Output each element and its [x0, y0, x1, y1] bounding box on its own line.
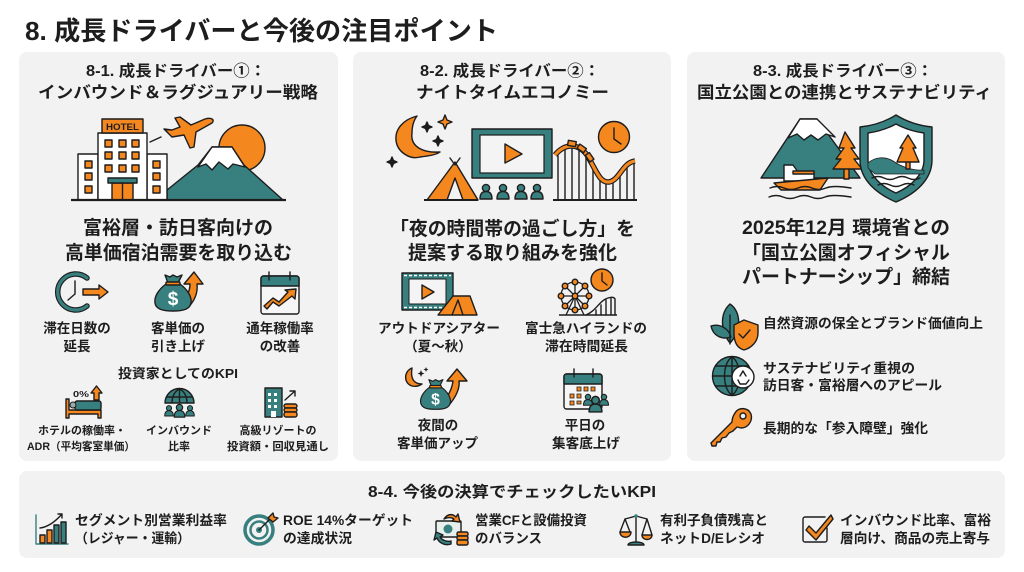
label: occupancy: の改善: [260, 338, 300, 354]
icon: boat: [774, 165, 828, 190]
subheading: 2025年12月 環境省との: [742, 216, 950, 239]
text: sustainability appeal: 訪日客・富裕層へのアピール: [763, 377, 943, 393]
icon: checkbox: [803, 515, 833, 542]
subheading: 「国立公園オフィシャル: [742, 242, 950, 264]
icon: bar chart: [36, 514, 68, 544]
label: night spending: 夜間の: [418, 417, 458, 433]
label: Fuji-Q stay: 滞在時間延長: [545, 338, 629, 354]
label: outdoor theater: [378, 321, 500, 354]
icon: mountain: [761, 119, 860, 178]
icon: Ferris wheel, clock and coaster: [558, 269, 617, 315]
subheading: [742, 216, 950, 288]
label: outdoor theater: アウトドアシアター: [378, 321, 500, 336]
icon: roller coaster: [555, 140, 635, 200]
label: resort investment: 投資額・回収見通し: [227, 439, 329, 453]
illustration: hotel, plane and Mt. Fuji: HOTEL: [106, 122, 139, 133]
label: night spending: [397, 417, 478, 451]
subheading: 高単価宿泊需要を取り込む: [65, 242, 292, 264]
heading: 8-3: 国立公園との連携とサステナビリティ: [697, 82, 992, 102]
icon: target with arrow: [245, 513, 278, 544]
label: night spending: 客単価アップ: [397, 435, 478, 451]
subheading: パートナーシップ」締結: [742, 266, 950, 288]
label: unit price: [151, 320, 205, 354]
heading: 8-2: ナイトタイムエコノミー: [416, 83, 609, 102]
text: ROE target: ROE 14%ターゲット: [283, 512, 413, 528]
text: sustainability appeal: サステナビリティ重視の: [763, 360, 915, 376]
label: inbound ratio: 比率: [168, 439, 190, 453]
label: inbound ratio: [146, 424, 212, 453]
label: weekday attendance: 集客底上げ: [552, 435, 621, 451]
label: occupancy and ADR: [27, 423, 135, 453]
icon: resort building with coins: [265, 388, 297, 417]
subheading: 「夜の時間帯の過ごし方」を: [390, 217, 635, 240]
icon: outdoor theater: [402, 273, 477, 315]
text: inbound and wealthy sales: 層向け、商品の売上寄与: [840, 530, 990, 546]
label: occupancy and ADR: ADR（平均客室単価）: [27, 439, 135, 453]
heading: 8-3: 8-3. 成長ドライバー③：: [753, 61, 933, 80]
subheading: 富裕層・訪日客向けの: [83, 217, 273, 239]
text: nature conservation: 自然資源の保全とブランド価値向上: [763, 315, 983, 331]
icon: pine tree: [833, 132, 862, 179]
heading: 8-3: [697, 61, 992, 102]
label: Fuji-Q stay: [525, 320, 647, 354]
subheading: investor KPI: 投資家としてのKPI: [118, 366, 238, 381]
icon: globe with people: [165, 388, 194, 417]
text: debt and D/E: ネットD/Eレシオ: [660, 531, 765, 546]
label: occupancy: 通年稼働率: [246, 320, 314, 336]
label: outdoor theater: （夏〜秋）: [404, 339, 472, 354]
heading: 8-1: [38, 61, 319, 102]
heading: 8-1: 8-1. 成長ドライバー①：: [86, 61, 266, 80]
text: inbound and wealthy sales: [840, 513, 992, 546]
icon: bed with occupancy arrow: [66, 386, 102, 418]
waves: [769, 186, 851, 198]
text: cash flow and capex: [475, 512, 587, 546]
icon: clock: [598, 122, 630, 152]
icon: shield: [860, 115, 932, 202]
label: stay length: 滞在日数の: [43, 320, 111, 336]
icon: night money bag: [406, 367, 467, 409]
icon: tent: [427, 158, 478, 200]
text: segment margin: セグメント別営業利益率: [75, 512, 227, 528]
subheading: [65, 217, 292, 264]
text: inbound and wealthy sales: インバウンド比率、富裕: [840, 513, 992, 528]
icon: audience: [480, 184, 543, 199]
icon: clock with arrow: [58, 274, 108, 310]
title: 8. 成長ドライバーと今後の注目ポイント: [25, 16, 498, 46]
text: segment margin: [75, 512, 227, 546]
text: cash flow and capex: のバランス: [475, 531, 542, 546]
text: entry barrier: 長期的な「参入障壁」強化: [763, 420, 929, 436]
text: debt and D/E: [660, 512, 768, 546]
text: ROE target: [283, 512, 413, 546]
icon: stars: [387, 115, 452, 167]
subheading: [390, 217, 635, 264]
label: stay length: [43, 320, 111, 354]
panel: growth driver 1: [19, 52, 338, 461]
label: unit price: 客単価の: [151, 320, 205, 336]
label: resort investment: 高級リゾートの: [240, 423, 316, 437]
label: occupancy and ADR: ホテルの稼働率・: [38, 423, 126, 437]
heading: 8-1: インバウンド＆ラグジュアリー戦略: [38, 82, 319, 102]
icon: bed with occupancy arrow: 0%: [73, 389, 90, 399]
heading: 8-2: 8-2. 成長ドライバー②：: [420, 61, 600, 80]
heading: 8-4: 8-4. 今後の決算でチェックしたいKPI: [368, 482, 656, 501]
label: weekday attendance: 平日の: [565, 418, 605, 433]
text: segment margin: （レジャー・運輸）: [75, 530, 190, 546]
text: cash flow and capex: 営業CFと設備投資: [475, 512, 587, 528]
icon: crescent moon: [396, 116, 440, 158]
icon: money bag with arrow: [155, 272, 203, 311]
text: sustainability appeal: [763, 360, 943, 393]
text: debt and D/E: 有利子負債残高と: [660, 512, 768, 528]
illustration: national park: [761, 115, 932, 202]
label: inbound ratio: インバウンド: [146, 424, 212, 437]
label: unit price: 引き上げ: [151, 339, 205, 354]
icon: calendar with trend: [261, 272, 299, 314]
label: weekday attendance: [552, 418, 621, 451]
icon: leaves and shield: [711, 304, 758, 350]
text: ROE target: の達成状況: [283, 530, 353, 546]
subheading: 提案する取り組みを強化: [408, 242, 617, 264]
icon: globe with recycling: [712, 356, 754, 396]
label: occupancy: [246, 320, 314, 354]
icon: key: [711, 409, 751, 446]
icon: calendar with visitors: [564, 369, 608, 412]
panel: growth driver 2: [353, 52, 671, 461]
panel: growth driver 3: [687, 52, 1005, 461]
label: resort investment: [227, 423, 329, 453]
icon: balance scale: [620, 514, 652, 545]
label: stay length: 延長: [64, 339, 91, 354]
illustration: hotel, plane and Mt. Fuji: [71, 117, 286, 200]
icon: cinema screen: [472, 129, 552, 178]
illustration: night-time entertainment: [387, 115, 637, 200]
label: Fuji-Q stay: 富士急ハイランドの: [525, 320, 647, 336]
heading: 8-2: [416, 61, 609, 102]
icon: cash flow and coins: [434, 514, 468, 545]
panel: KPIs to check: [19, 471, 1005, 558]
